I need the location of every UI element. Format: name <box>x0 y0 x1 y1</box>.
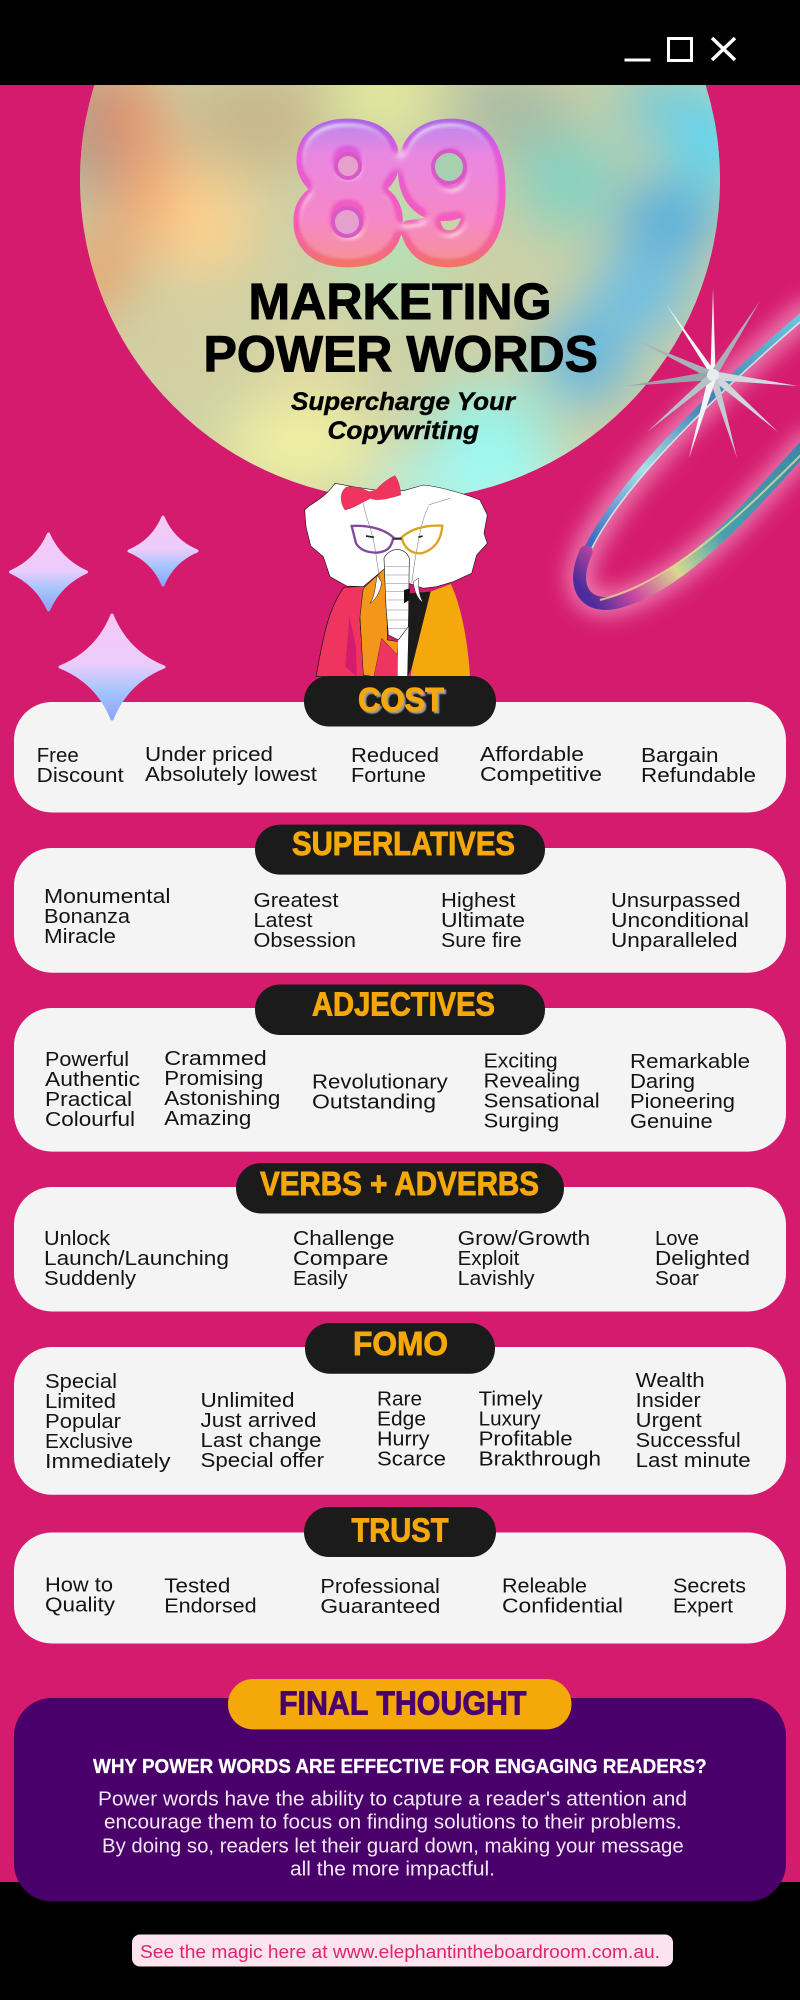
words: column 3 <box>458 1227 590 1290</box>
sparkle: left <box>10 534 86 610</box>
words: column 5: Last minute <box>636 1449 751 1472</box>
bow <box>341 476 401 510</box>
words: column 1: Special <box>45 1370 117 1393</box>
lapel black <box>407 592 431 677</box>
words: column 4: Competitive <box>480 763 602 786</box>
heading pill: verbs and adverbs <box>236 1163 564 1214</box>
glasses <box>352 526 442 553</box>
words: column 4: Timely <box>479 1387 543 1410</box>
subheading: WHY POWER WORDS ARE EFFECTIVE FOR ENGAGING READERS? <box>93 1755 707 1778</box>
words: column 5: Genuine <box>630 1110 713 1133</box>
eyes <box>366 536 423 537</box>
words: column 3: Highest <box>441 889 516 912</box>
words: column 2: Tested <box>164 1574 230 1597</box>
words: column 1: Launch/Launching <box>44 1247 229 1270</box>
subtitle: Supercharge Your <box>291 388 516 416</box>
words: column 4: Unsurpassed <box>611 889 741 912</box>
words: column 4 <box>479 1387 601 1470</box>
words: column 3 <box>320 1575 440 1618</box>
scarf orange <box>360 567 398 677</box>
heading pill: cost <box>304 676 496 726</box>
words: column 2: Last change <box>200 1429 322 1452</box>
words: column 2 <box>145 743 317 786</box>
words: column 4: Love <box>655 1227 699 1250</box>
words: column 1 <box>44 1227 229 1290</box>
words: column 3: Grow/Growth <box>458 1227 590 1250</box>
paragraph <box>98 1789 687 1880</box>
words: column 4 <box>484 1050 600 1132</box>
words: column 2: Obsession <box>254 929 356 952</box>
paragraph: Power words have the ability to capture a reader's attention and <box>98 1789 687 1811</box>
tusks <box>370 575 423 603</box>
words: column 3: Edge <box>377 1407 426 1430</box>
heading pill: adjectives: ADJECTIVES <box>312 986 495 1022</box>
heading pill: final thought: FINAL THOUGHT <box>279 1685 526 1722</box>
words: column 3: Reduced <box>351 744 439 767</box>
words: column 5 <box>630 1050 750 1133</box>
words: column 2: Special offer <box>200 1449 324 1472</box>
panel: trust <box>14 1507 786 1644</box>
holographic ring <box>580 305 800 603</box>
title <box>204 273 598 382</box>
words: column 1: Discount <box>37 764 124 787</box>
words: column 3: Rare <box>377 1387 422 1410</box>
words: column 4: Releable <box>502 1574 587 1597</box>
top black bar with window controls <box>0 0 800 85</box>
words: column 3 <box>377 1387 446 1470</box>
jacket yellow <box>411 584 470 677</box>
words: column 4: Surging <box>484 1110 559 1132</box>
words: column 2: Under priced <box>145 743 273 766</box>
words: column 1: Exclusive <box>45 1430 133 1453</box>
words: column 5: Remarkable <box>630 1050 750 1073</box>
words: column 3 <box>441 889 525 952</box>
words: column 5: Refundable <box>641 764 756 787</box>
heading pill: trust <box>304 1507 496 1557</box>
panel: final thought <box>14 1679 786 1902</box>
words: column 3: Revolutionary <box>312 1070 449 1094</box>
words: column 2 <box>254 889 356 952</box>
heading pill: superlatives <box>255 825 545 875</box>
words: column 4: Soar <box>655 1267 699 1290</box>
words: column 3: Exploit <box>458 1247 520 1270</box>
words: column 3: Outstanding <box>312 1090 436 1114</box>
words: column 2 <box>164 1047 280 1130</box>
paragraph: By doing so, readers let their guard down, making your message <box>102 1836 684 1858</box>
words: column 4 <box>655 1227 750 1290</box>
words: column 1: Monumental <box>44 885 170 908</box>
holes of the balloon digits <box>333 151 465 236</box>
words: column 5: Daring <box>630 1070 695 1093</box>
words: column 1: Practical <box>45 1088 132 1111</box>
words: column 1: Unlock <box>44 1227 111 1250</box>
words: column 3: Professional <box>320 1575 440 1598</box>
words: column 2: Unlimited <box>200 1389 294 1412</box>
panel: cost <box>14 676 786 812</box>
words: column 1: Free <box>37 744 79 767</box>
star flare <box>627 288 798 458</box>
words: column 2: Astonishing <box>164 1087 280 1110</box>
words: column 3 <box>351 744 439 787</box>
heading pill: fomo <box>305 1323 495 1374</box>
subtitle <box>291 388 516 445</box>
words: column 3: Ultimate <box>441 909 525 932</box>
words: column 3: Scarce <box>377 1447 446 1470</box>
heading pill: verbs and adverbs: VERBS + ADVERBS <box>260 1165 539 1202</box>
panel: fomo <box>14 1323 786 1495</box>
words: column 2: Challenge <box>293 1227 394 1250</box>
words: column 4: Unconditional <box>611 909 749 932</box>
words: column 4: Affordable <box>480 743 584 766</box>
icon: maximize <box>668 38 692 60</box>
panel: superlatives <box>14 825 786 973</box>
heading pill: cost: COST <box>358 681 444 718</box>
words: column 1: Miracle <box>44 925 116 948</box>
heading pill: fomo: FOMO <box>353 1325 448 1362</box>
holographic circle <box>80 85 720 494</box>
icon: minimize <box>624 58 650 62</box>
paragraph: encourage them to focus on finding solutions to their problems. <box>104 1812 682 1834</box>
words: column 1: How to <box>45 1574 113 1596</box>
words: column 5 <box>673 1574 746 1617</box>
words: column 2: Latest <box>254 909 313 932</box>
words: column 5: Urgent <box>636 1409 702 1432</box>
words: column 4: Brakthrough <box>479 1447 601 1470</box>
words: column 5: Wealth <box>636 1369 705 1392</box>
words: column 4 <box>480 743 602 786</box>
words: column 5: Pioneering <box>630 1090 735 1113</box>
sparkle: upper <box>129 517 197 585</box>
words: column 1 <box>45 1370 171 1473</box>
tie knot <box>404 588 410 603</box>
words: column 5: Successful <box>636 1429 741 1452</box>
words: column 5: Secrets <box>673 1574 746 1597</box>
big number 89: 89 <box>296 90 504 297</box>
words: column 3 <box>312 1070 449 1114</box>
heading pill: trust: TRUST <box>352 1512 448 1549</box>
words: column 3: Hurry <box>377 1427 430 1450</box>
heading pill: final thought <box>228 1679 572 1729</box>
words: column 1: Quality <box>45 1594 116 1616</box>
heading pill: superlatives: SUPERLATIVES <box>292 825 515 862</box>
words: column 2: Promising <box>164 1067 263 1090</box>
words: column 1: Limited <box>45 1390 116 1413</box>
title: MARKETING <box>248 273 552 330</box>
words: column 1: Popular <box>45 1410 121 1433</box>
bottom black band <box>0 1882 800 2000</box>
shirt white <box>398 593 409 677</box>
words: column 4: Exciting <box>484 1050 558 1072</box>
website link badge: See the magic here at www.elephantintheboardroom.com.au. <box>140 1942 660 1962</box>
words: column 4: Delighted <box>655 1247 750 1270</box>
words: column 4: Unparalleled <box>611 929 738 952</box>
jacket red <box>316 586 365 677</box>
trunk wrinkles <box>385 567 409 628</box>
words: column 2 <box>200 1389 324 1472</box>
heading pill: adjectives <box>255 984 545 1035</box>
words: column 5: Expert <box>673 1594 733 1617</box>
words: column 3: Lavishly <box>458 1267 535 1290</box>
words: column 5: Insider <box>636 1389 701 1412</box>
words: column 2: Easily <box>293 1267 348 1290</box>
panel: verbs and adverbs <box>14 1163 786 1312</box>
paragraph: all the more impactful. <box>290 1858 495 1880</box>
words: column 1: Powerful <box>45 1048 129 1071</box>
words: column 1: Colourful <box>45 1108 135 1131</box>
trunk <box>384 550 409 640</box>
words: column 1 <box>37 744 124 787</box>
words: column 4: Profitable <box>479 1427 573 1450</box>
words: column 5 <box>641 744 756 787</box>
words: column 2: Just arrived <box>200 1409 316 1432</box>
words: column 1 <box>45 1048 140 1131</box>
words: column 2: Endorsed <box>164 1594 257 1617</box>
words: column 1: Suddenly <box>44 1267 137 1290</box>
words: column 2 <box>293 1227 394 1290</box>
words: column 1: Immediately <box>45 1450 171 1473</box>
words: column 4: Sensational <box>484 1090 600 1112</box>
sparkle: large <box>60 615 164 719</box>
words: column 5: Bargain <box>641 744 718 767</box>
head lines <box>363 498 450 583</box>
sleeve gap <box>345 617 357 677</box>
words: column 3: Sure fire <box>441 929 522 952</box>
subtitle: Copywriting <box>328 417 479 445</box>
words: column 2: Amazing <box>164 1107 251 1130</box>
words: column 2: Compare <box>293 1247 388 1270</box>
icon: close <box>712 38 735 60</box>
words: column 2: Greatest <box>254 889 339 912</box>
words: column 4 <box>502 1574 623 1617</box>
title: POWER WORDS <box>204 326 598 382</box>
words: column 1 <box>44 885 170 948</box>
words: column 1 <box>45 1574 116 1616</box>
elephant illustration <box>305 476 487 677</box>
words: column 2 <box>164 1574 257 1617</box>
words: column 4: Confidential <box>502 1594 623 1617</box>
words: column 5 <box>636 1369 751 1472</box>
ears and head <box>305 483 487 588</box>
words: column 3: Fortune <box>351 764 426 787</box>
words: column 1: Bonanza <box>44 905 131 928</box>
words: column 1: Authentic <box>45 1068 140 1091</box>
top red <box>374 638 397 677</box>
words: column 4: Revealing <box>484 1070 580 1092</box>
panel: adjectives <box>14 984 786 1152</box>
words: column 2: Crammed <box>164 1047 267 1070</box>
words: column 2: Absolutely lowest <box>145 763 317 786</box>
words: column 4 <box>611 889 749 952</box>
words: column 3: Guaranteed <box>320 1595 440 1618</box>
words: column 4: Luxury <box>479 1407 541 1430</box>
website link badge <box>132 1934 673 1966</box>
